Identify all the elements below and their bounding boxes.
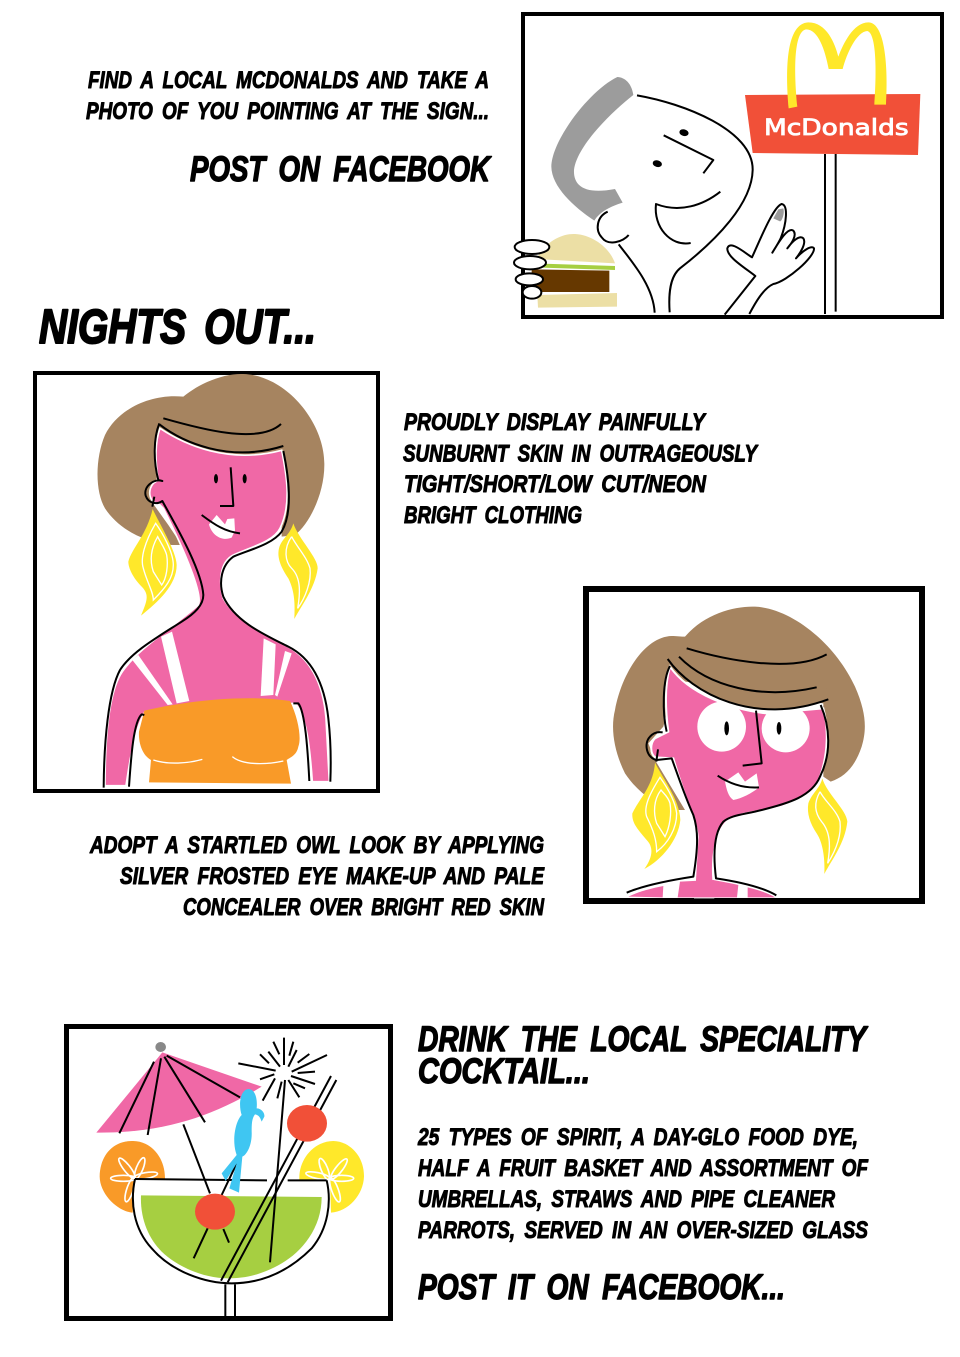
burger in hand [514,234,617,308]
owl eyes [697,702,810,752]
text block: proudly display: SUNBURNT SKIN IN OUTRAGEOUSLY [403,440,759,468]
right earring [278,523,318,619]
text block: proudly display: TIGHT/SHORT/LOW CUT/NEON [404,471,707,498]
panel: man pointing at McDonalds sign [514,14,942,317]
outlines [627,648,828,895]
McDonalds sign board [745,94,920,155]
text block: find a local McDonalds [86,67,489,125]
heading: post on Facebook: POST ON FACEBOOK [190,150,492,189]
chest pieces [628,880,775,897]
hair [97,374,324,545]
orange slice [100,1141,165,1213]
text block: 25 types of spirit: UMBRELLAS, STRAWS AND PIPE CLEANER [418,1186,836,1213]
text block: startled owl look [89,832,545,921]
text block: proudly display: PROUDLY DISPLAY PAINFULLY [404,409,707,436]
text block: proudly display: BRIGHT CLOTHING [404,502,582,529]
panel: cocktail illustration [66,1026,390,1318]
text block: find a local McDonalds: FIND A LOCAL MCDONALDS AND TAKE A [88,67,489,94]
panel: sunburnt woman in orange top [35,373,378,791]
red cherry on straw [287,1105,327,1142]
text block: find a local McDonalds: PHOTO OF YOU POINTING AT THE SIGN... [86,98,489,125]
heading: post it on Facebook: POST IT ON FACEBOOK... [418,1268,785,1307]
heading: drink the local speciality cocktail: DRINK THE LOCAL SPECIALITY [418,1020,868,1059]
lemon slice [299,1141,364,1213]
panel: startled owl look woman [586,589,922,901]
sign pole [825,154,836,314]
straws and sparkler [221,1038,336,1282]
cocktail liquid [141,1195,322,1278]
hair [613,607,865,810]
text block: startled owl look: CONCEALER OVER BRIGHT RED SKIN [183,894,545,921]
heading: drink the local speciality cocktail: COCKTAIL... [418,1052,590,1091]
heading: drink the local speciality cocktail [418,1020,868,1091]
skin [651,667,827,897]
cherry and olive sticks [194,1163,237,1258]
straps [132,632,292,705]
fringe [668,647,828,709]
text block: startled owl look: ADOPT A STARTLED OWL LOOK BY APPLYING [89,832,544,859]
pipe cleaner parrot [222,1089,264,1193]
skin [105,428,329,786]
left earring [632,763,680,869]
sign text: McDonalds [764,116,909,141]
body outlines [104,418,331,788]
text block: proudly display [403,409,759,529]
text block: 25 types of spirit [417,1124,869,1244]
mouth [718,772,759,800]
face [202,467,247,539]
icon: grey hair [551,77,633,221]
right earring [808,778,847,874]
text block: startled owl look: SILVER FROSTED EYE MAKE-UP AND PALE [120,863,545,890]
golden arches [787,22,887,108]
glass [133,1179,329,1317]
orange top [139,698,300,784]
red cherry in glass [195,1194,235,1230]
cocktail umbrella [96,1042,262,1193]
left earring [128,509,177,616]
text block: 25 types of spirit: 25 TYPES OF SPIRIT, A DAY-GLO FOOD DYE, [417,1124,858,1151]
pointing hand [725,204,814,315]
man's face lines [598,95,753,313]
heading: nights out: NIGHTS OUT... [39,301,316,354]
